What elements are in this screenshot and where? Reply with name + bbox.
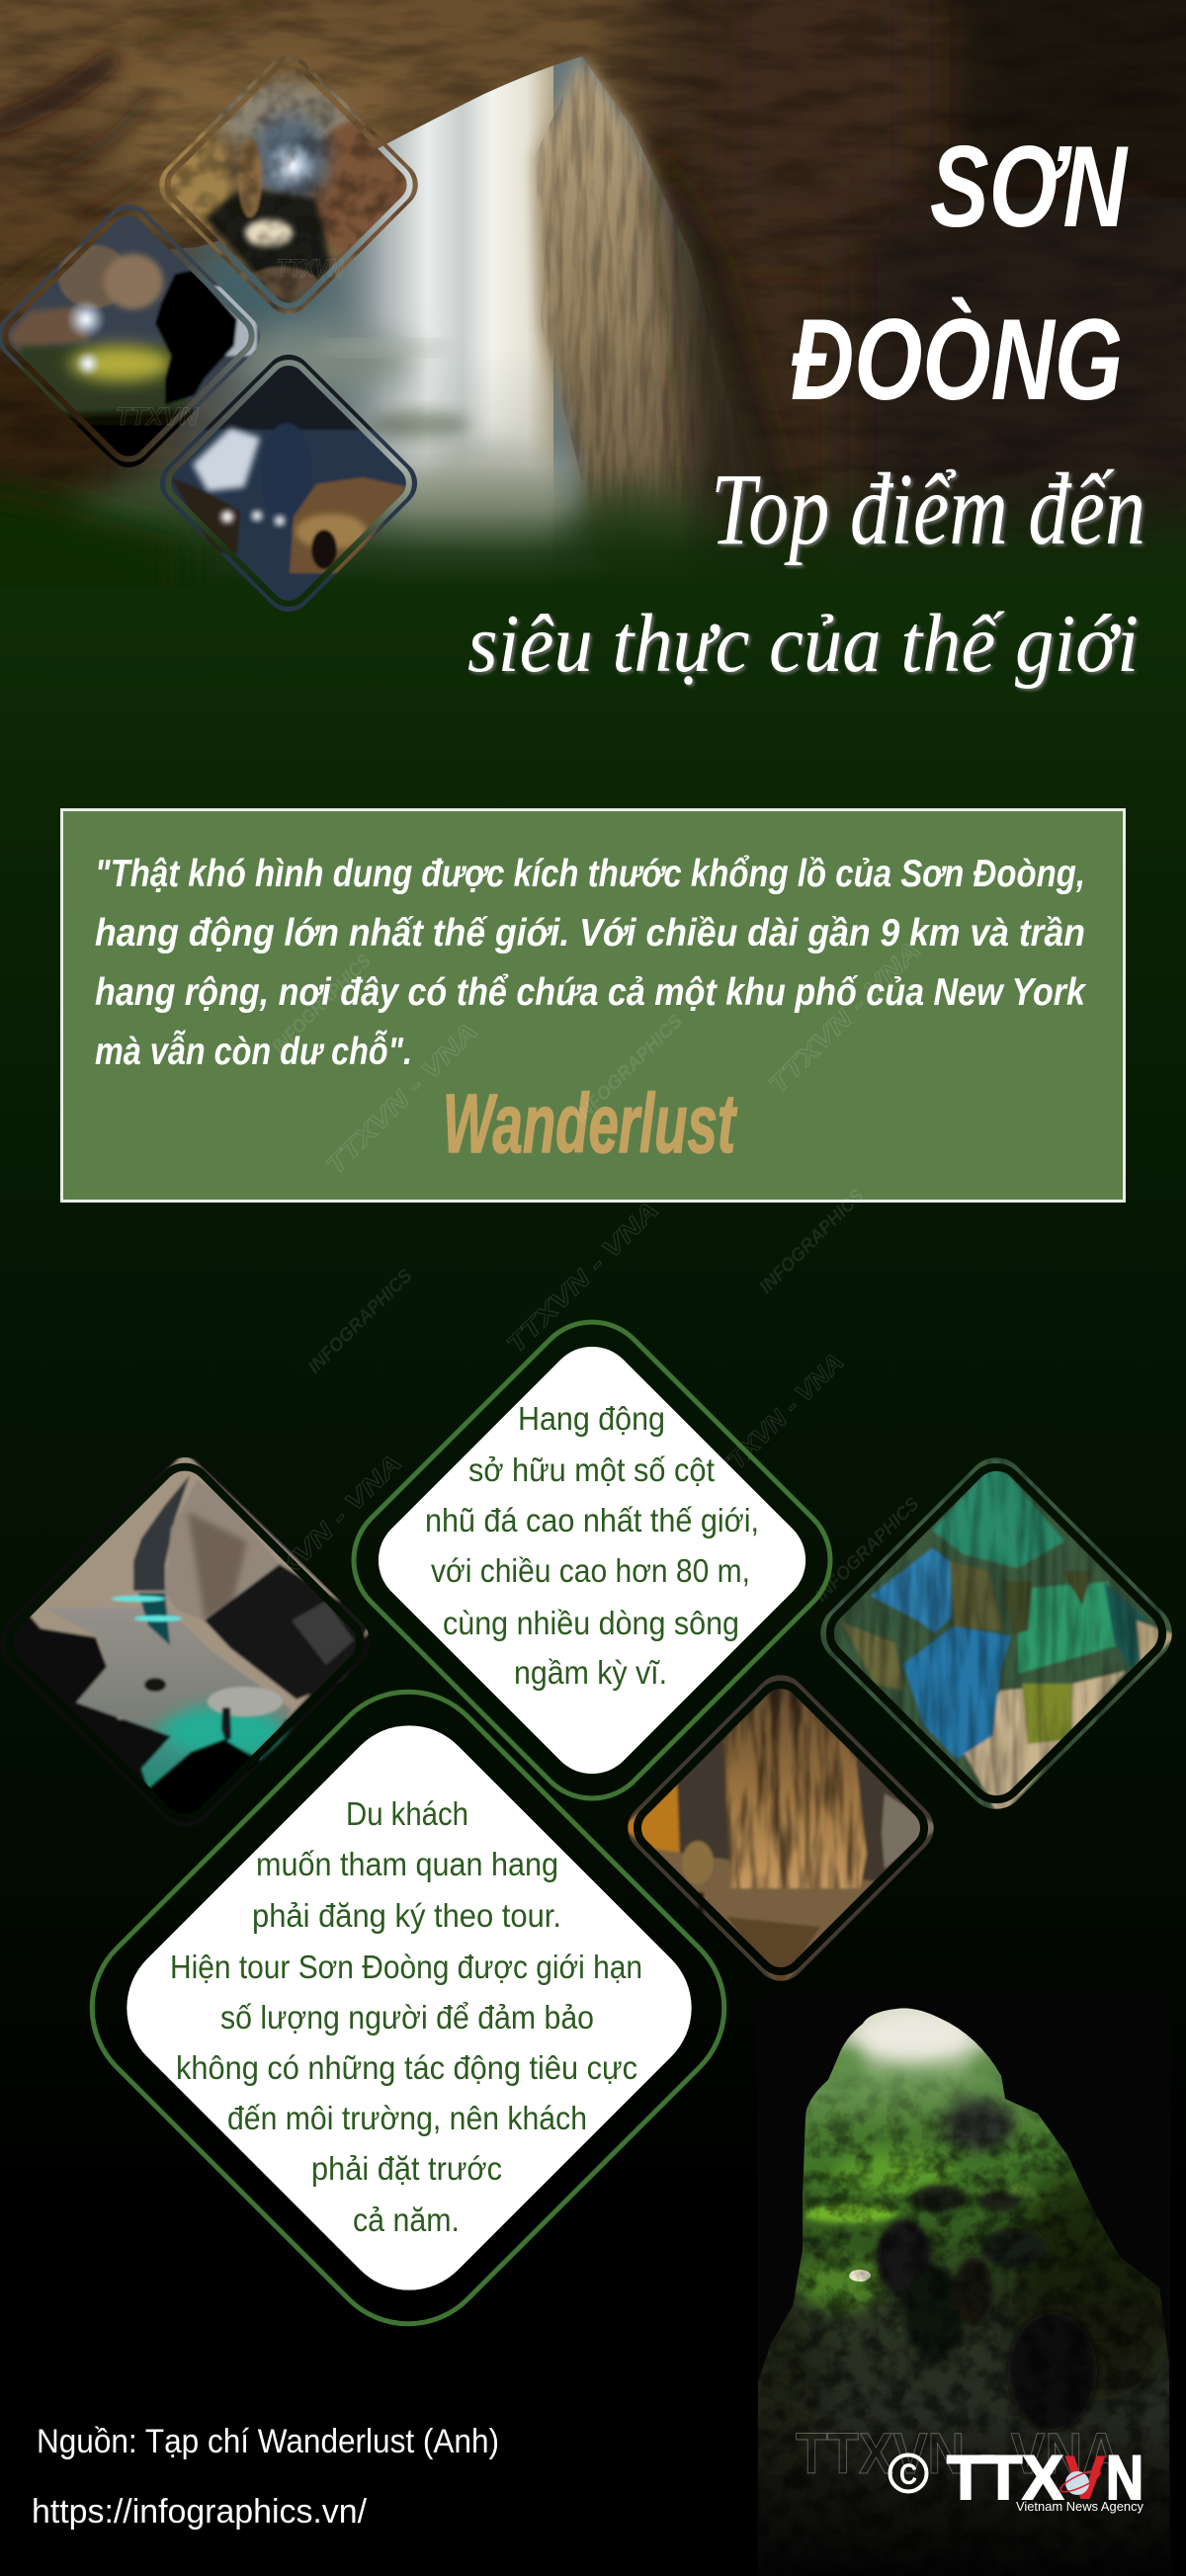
diamond text: với chiều cao hơn 80 m, bbox=[431, 1552, 750, 1589]
panel: text diamond about tours bbox=[57, 1657, 759, 2359]
TTXVN logo: Vietnam News Agency bbox=[1016, 2499, 1144, 2514]
watermark on bottom photo: TTXVN - VNA bbox=[796, 2422, 1120, 2486]
diamond text: ngầm kỳ vĩ. bbox=[514, 1654, 667, 1691]
diamond text: Du khách bbox=[346, 1795, 468, 1832]
photo diamond: blue and green stalactites bbox=[810, 1453, 1186, 1818]
background watermarks: INFOGRAPHICS bbox=[756, 1185, 869, 1298]
tan rock pillar bbox=[524, 52, 797, 571]
background watermarks: TTXVN - VNA bbox=[711, 1348, 849, 1486]
background watermarks: TTXVN - VNA bbox=[244, 1449, 407, 1612]
source line: Nguồn: Tạp chí Wanderlust (Anh) bbox=[37, 2423, 499, 2460]
rock texture bbox=[0, 0, 1186, 486]
watermarks on hero photos bbox=[116, 255, 344, 431]
diamond text: Hang động bbox=[518, 1400, 665, 1437]
subtitle script text bbox=[467, 453, 1145, 690]
hero cave photo background bbox=[0, 0, 1186, 575]
title: SƠN ĐOÒNG: SƠN bbox=[930, 122, 1129, 251]
background watermarks: INFOGRAPHICS bbox=[269, 951, 376, 1058]
fade to green bbox=[80, 472, 1186, 587]
TTXVN logo: C bbox=[899, 2458, 917, 2491]
website link: https://infographics.vn/ bbox=[32, 2493, 368, 2531]
dark cracks in rock ceiling bbox=[0, 0, 257, 296]
waterfall and opening bbox=[127, 56, 717, 573]
TTXVN logo bbox=[890, 2444, 1144, 2514]
quote text: hang động lớn nhất thế giới. Với chiều dài gần 9 km và trần bbox=[95, 912, 1085, 955]
diamond text: cả năm. bbox=[353, 2202, 460, 2238]
photo diamond: blue lit cave with lights and rock bbox=[160, 354, 417, 613]
TTXVN logo: V bbox=[1064, 2444, 1106, 2513]
photo diamond: cave with silhouette and green water bbox=[0, 198, 267, 474]
subtitle script text: siêu thực của thế giới bbox=[467, 598, 1139, 690]
diamond text bbox=[170, 1795, 642, 2238]
panel: Wanderlust quote bbox=[61, 810, 1125, 1202]
diamond text: phải đặt trước bbox=[311, 2150, 502, 2187]
photo diamond: underground lake with teal light bbox=[0, 1453, 376, 1838]
diamond text: Hiện tour Sơn Đoòng được giới hạn bbox=[170, 1949, 642, 1985]
TTXVN logo: TTX bbox=[947, 2444, 1063, 2513]
diamond text bbox=[425, 1400, 759, 1691]
title: SƠN ĐOÒNG bbox=[791, 122, 1129, 424]
photo diamond: giant stalagmite column bbox=[623, 1670, 939, 1986]
background watermarks: INFOGRAPHICS bbox=[304, 1265, 417, 1378]
diamond text: nhũ đá cao nhất thế giới, bbox=[425, 1502, 759, 1538]
background watermarks: INFOGRAPHICS bbox=[571, 1011, 687, 1127]
diamond text: sở hữu một số cột bbox=[468, 1452, 715, 1488]
background watermarks: TTXVN - VNA bbox=[320, 1017, 483, 1180]
diamond text: số lượng người để đảm bảo bbox=[220, 1999, 594, 2036]
diamond text: không có những tác động tiêu cực bbox=[176, 2049, 637, 2086]
diamond text: cùng nhiều dòng sông bbox=[443, 1605, 739, 1641]
quote text bbox=[95, 853, 1087, 1073]
photo: cave entrance with moss bbox=[758, 2008, 1169, 2553]
Wanderlust logo: Wanderlust bbox=[443, 1077, 737, 1170]
diamond text: đến môi trường, nên khách bbox=[227, 2100, 587, 2136]
quote text: mà vẫn còn dư chỗ". bbox=[95, 1030, 412, 1073]
background watermarks bbox=[244, 936, 926, 1612]
photo diamond: cave tunnel with blue light bbox=[159, 55, 418, 314]
watermarks on hero photos: TTXVN bbox=[116, 403, 199, 431]
watermarks on hero photos: TTXVN bbox=[277, 255, 344, 283]
background watermarks: INFOGRAPHICS bbox=[811, 1493, 924, 1607]
panel: text diamond about stalagmites bbox=[329, 1297, 855, 1823]
background watermarks: TTXVN - VNA bbox=[501, 1196, 664, 1359]
fern and haze foreground bbox=[69, 450, 702, 568]
TTXVN logo: N bbox=[1106, 2444, 1144, 2513]
diamond text: phải đăng ký theo tour. bbox=[252, 1897, 561, 1934]
diamond text: muốn tham quan hang bbox=[256, 1846, 558, 1882]
background watermarks: TTXVN - VNA bbox=[763, 936, 926, 1099]
